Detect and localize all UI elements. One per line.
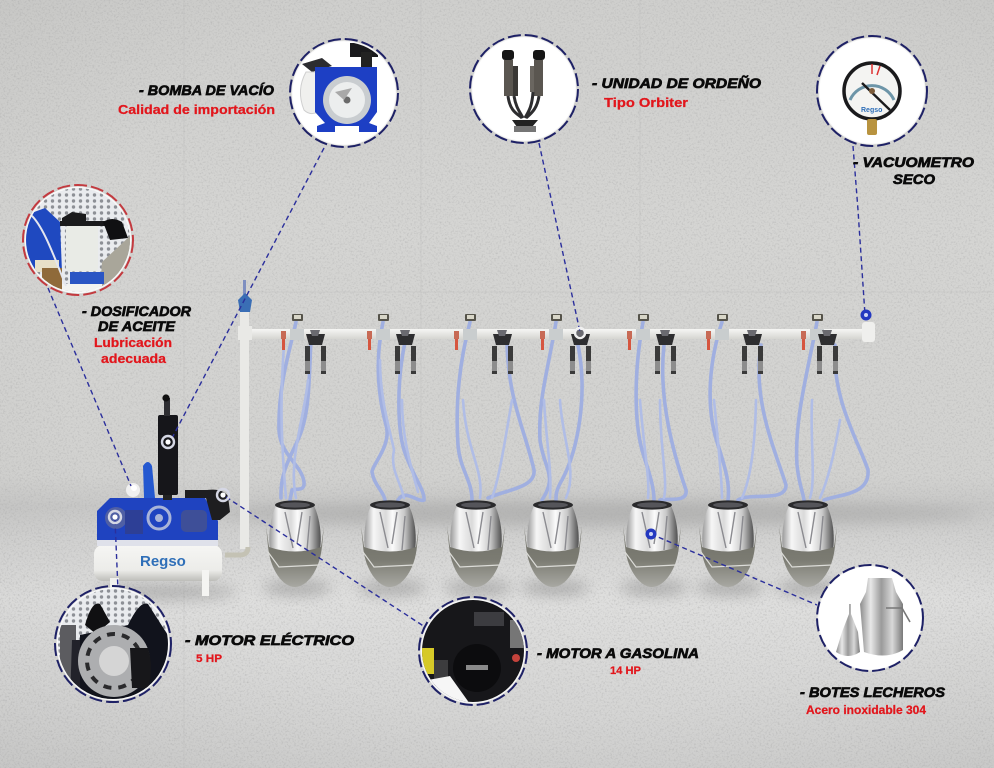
heading: vacuómetro seco: SECO [893,171,935,187]
heading: motor a gasolina: 14 HP [610,665,641,677]
callout: motor eléctrico [55,586,171,702]
heading: botes lecheros: - BOTES LECHEROS [800,684,946,700]
heading: unidad de ordeño: - UNIDAD DE ORDEÑO [592,74,761,91]
milking unit 3 [444,314,534,595]
heading: dosificador de aceite: Lubricación [94,335,172,350]
heading: motor eléctrico [185,632,354,665]
heading: unidad de ordeño: Tipo Orbiter [604,95,688,110]
milking unit 6 [696,314,786,595]
heading: vacuómetro seco: - VACUOMETRO [853,154,974,170]
leader target dots [109,310,872,540]
milking unit 5 [620,314,688,595]
air tank with Regso logo [94,545,222,596]
milking unit 4 [521,314,591,595]
heading: motor a gasolina [537,645,699,677]
black vacuum reservoir [158,394,178,500]
pipe: vertical supply and horizontal manifold [225,312,875,555]
milking unit 1 [263,314,331,595]
blue oil bottle [143,462,155,498]
callout: vacuómetro seco [817,36,927,146]
heading: unidad de ordeño [592,74,761,110]
heading: vacuómetro seco [853,154,974,187]
callout: dosificador de aceite [23,185,133,295]
icon: blue vent at top of pipe [238,280,252,312]
callout leader lines [48,143,865,627]
callout: motor a gasolina [419,597,527,705]
heading: dosificador de aceite [82,303,192,366]
heading: bomba de vacío: - BOMBA DE VACÍO [139,82,274,98]
heading: dosificador de aceite: - DOSIFICADOR [82,303,192,319]
gasoline motor head [185,490,230,520]
milking unit 7 [776,314,868,595]
white oil cap [126,483,140,497]
heading: dosificador de aceite: adecuada [101,351,167,366]
callout: bomba de vacío [290,39,398,147]
blue motor cover [97,498,218,546]
heading: motor eléctrico: - MOTOR ELÉCTRICO [185,632,354,648]
heading: botes lecheros [800,684,946,717]
heading: dosificador de aceite: DE ACEITE [98,318,176,334]
vacuum pump compressor unit [93,394,237,600]
callout: unidad de ordeño [470,35,578,143]
compressor shadow [93,584,237,600]
heading: motor a gasolina: - MOTOR A GASOLINA [537,645,699,661]
heading: bomba de vacío: Calidad de importación [118,102,275,117]
heading: bomba de vacío [118,82,275,117]
heading: motor eléctrico: 5 HP [196,653,222,665]
heading: botes lecheros: Acero inoxidable 304 [806,703,926,717]
air tank with Regso logo: Regso [140,553,186,570]
milking unit 2 [358,314,426,595]
callout: botes lecheros [817,565,923,671]
callout: vacuómetro seco: Regso [861,107,882,114]
